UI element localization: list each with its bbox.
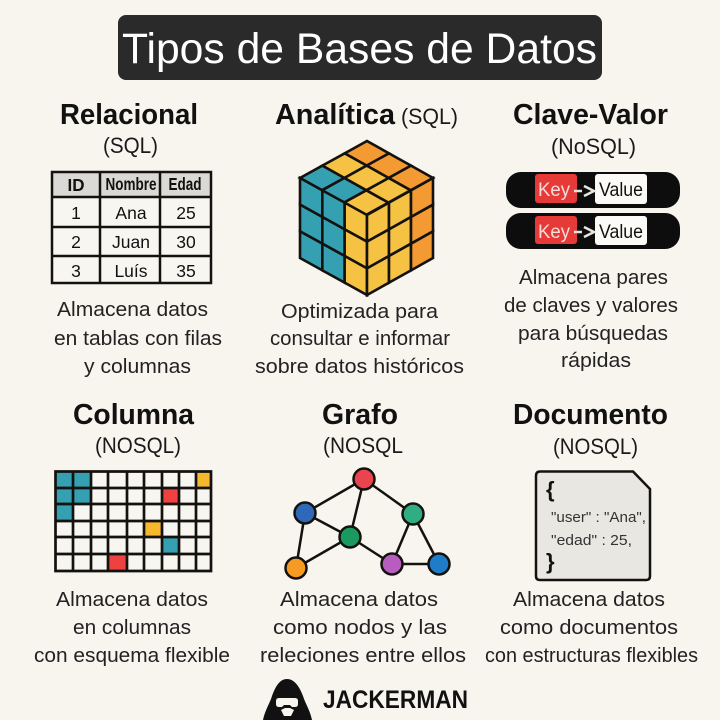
table diagram: Nombre (106, 174, 157, 194)
subheading: grafo: (NOSQL (323, 433, 403, 458)
icon: key-value pair 2 (506, 213, 680, 249)
subheading: analitica: (SQL) (401, 104, 458, 129)
table diagram: 3 (71, 261, 81, 281)
icon: json document: "user" : "Ana", (551, 509, 646, 526)
description: clave-valor: Almacena pares (519, 266, 668, 289)
graph diagram (286, 468, 450, 578)
table diagram (52, 172, 211, 283)
table diagram: 25 (176, 203, 196, 223)
title: Tipos de Bases de Datos (122, 26, 597, 73)
description: columna: Almacena datos (56, 588, 208, 611)
subheading: clave-valor: (NoSQL) (551, 134, 636, 159)
description: documento: con estructuras flexibles (485, 644, 698, 667)
description: grafo: como nodos y las (273, 616, 447, 639)
table diagram: Juan (112, 232, 150, 252)
logo: jackerman (263, 679, 468, 720)
icon: hooded figure (263, 679, 312, 720)
icon: key-value pair 1: Value (599, 179, 643, 201)
icon: json document (536, 472, 650, 580)
description: analitica (255, 300, 464, 378)
icon: key-value pair 2: Key (538, 221, 570, 243)
table diagram: Luís (114, 261, 148, 281)
description: documento: Almacena datos (513, 588, 665, 611)
heading: clave-valor: Clave-Valor (513, 99, 668, 131)
description: documento (485, 588, 698, 667)
description: grafo (260, 588, 466, 667)
description: grafo: releciones entre ellos (260, 644, 466, 667)
panel: grafo (260, 399, 466, 667)
subheading: documento: (NOSQL) (553, 434, 638, 459)
heading: grafo: Grafo (322, 399, 398, 431)
panel: clave-valor (504, 99, 680, 372)
icon: key-value pair 1 (506, 172, 680, 208)
icon: json document: "edad" : 25, (551, 532, 632, 549)
description: analitica: Optimizada para (281, 300, 439, 323)
heading: columna: Columna (73, 399, 195, 431)
icon: key-value pair 1: Key (538, 179, 570, 201)
description: clave-valor: rápidas (561, 349, 631, 372)
column store grid (56, 472, 211, 571)
description: clave-valor (504, 266, 678, 372)
subheading: columna: (NOSQL) (95, 433, 181, 458)
panel: documento (485, 399, 698, 667)
icon: cube (300, 141, 433, 295)
panel: analitica (255, 99, 464, 378)
description: columna (34, 588, 230, 667)
description: columna: en columnas (73, 616, 191, 639)
description: clave-valor: de claves y valores (504, 294, 678, 317)
description: relacional: Almacena datos (57, 298, 208, 321)
icon: json document: { (546, 477, 555, 502)
table diagram: 35 (176, 261, 196, 281)
description: documento: como documentos (500, 616, 678, 639)
description: analitica: sobre datos históricos (255, 355, 464, 378)
heading: analitica: Analítica (275, 99, 396, 131)
heading: documento: Documento (513, 399, 668, 431)
brand name: JACKERMAN (323, 686, 468, 714)
description: analitica: consultar e informar (270, 327, 450, 350)
description: relacional (54, 298, 222, 378)
table diagram: Edad (168, 174, 202, 194)
panel: columna (34, 399, 230, 667)
table diagram: 1 (71, 203, 81, 223)
icon: json document: } (546, 549, 555, 574)
table diagram: 30 (176, 232, 196, 252)
table diagram: 2 (71, 232, 81, 252)
description: clave-valor: para búsquedas (518, 322, 668, 345)
description: relacional: y columnas (84, 355, 191, 378)
subheading: relacional: (SQL) (103, 133, 158, 158)
description: columna: con esquema flexible (34, 644, 230, 667)
table diagram: ID (68, 175, 84, 195)
heading: relacional: Relacional (60, 99, 198, 131)
table diagram: Ana (115, 203, 147, 223)
description: grafo: Almacena datos (280, 588, 438, 611)
panel: relacional (52, 99, 222, 378)
icon: key-value pair 2: Value (599, 221, 643, 243)
description: relacional: en tablas con filas (54, 327, 222, 350)
